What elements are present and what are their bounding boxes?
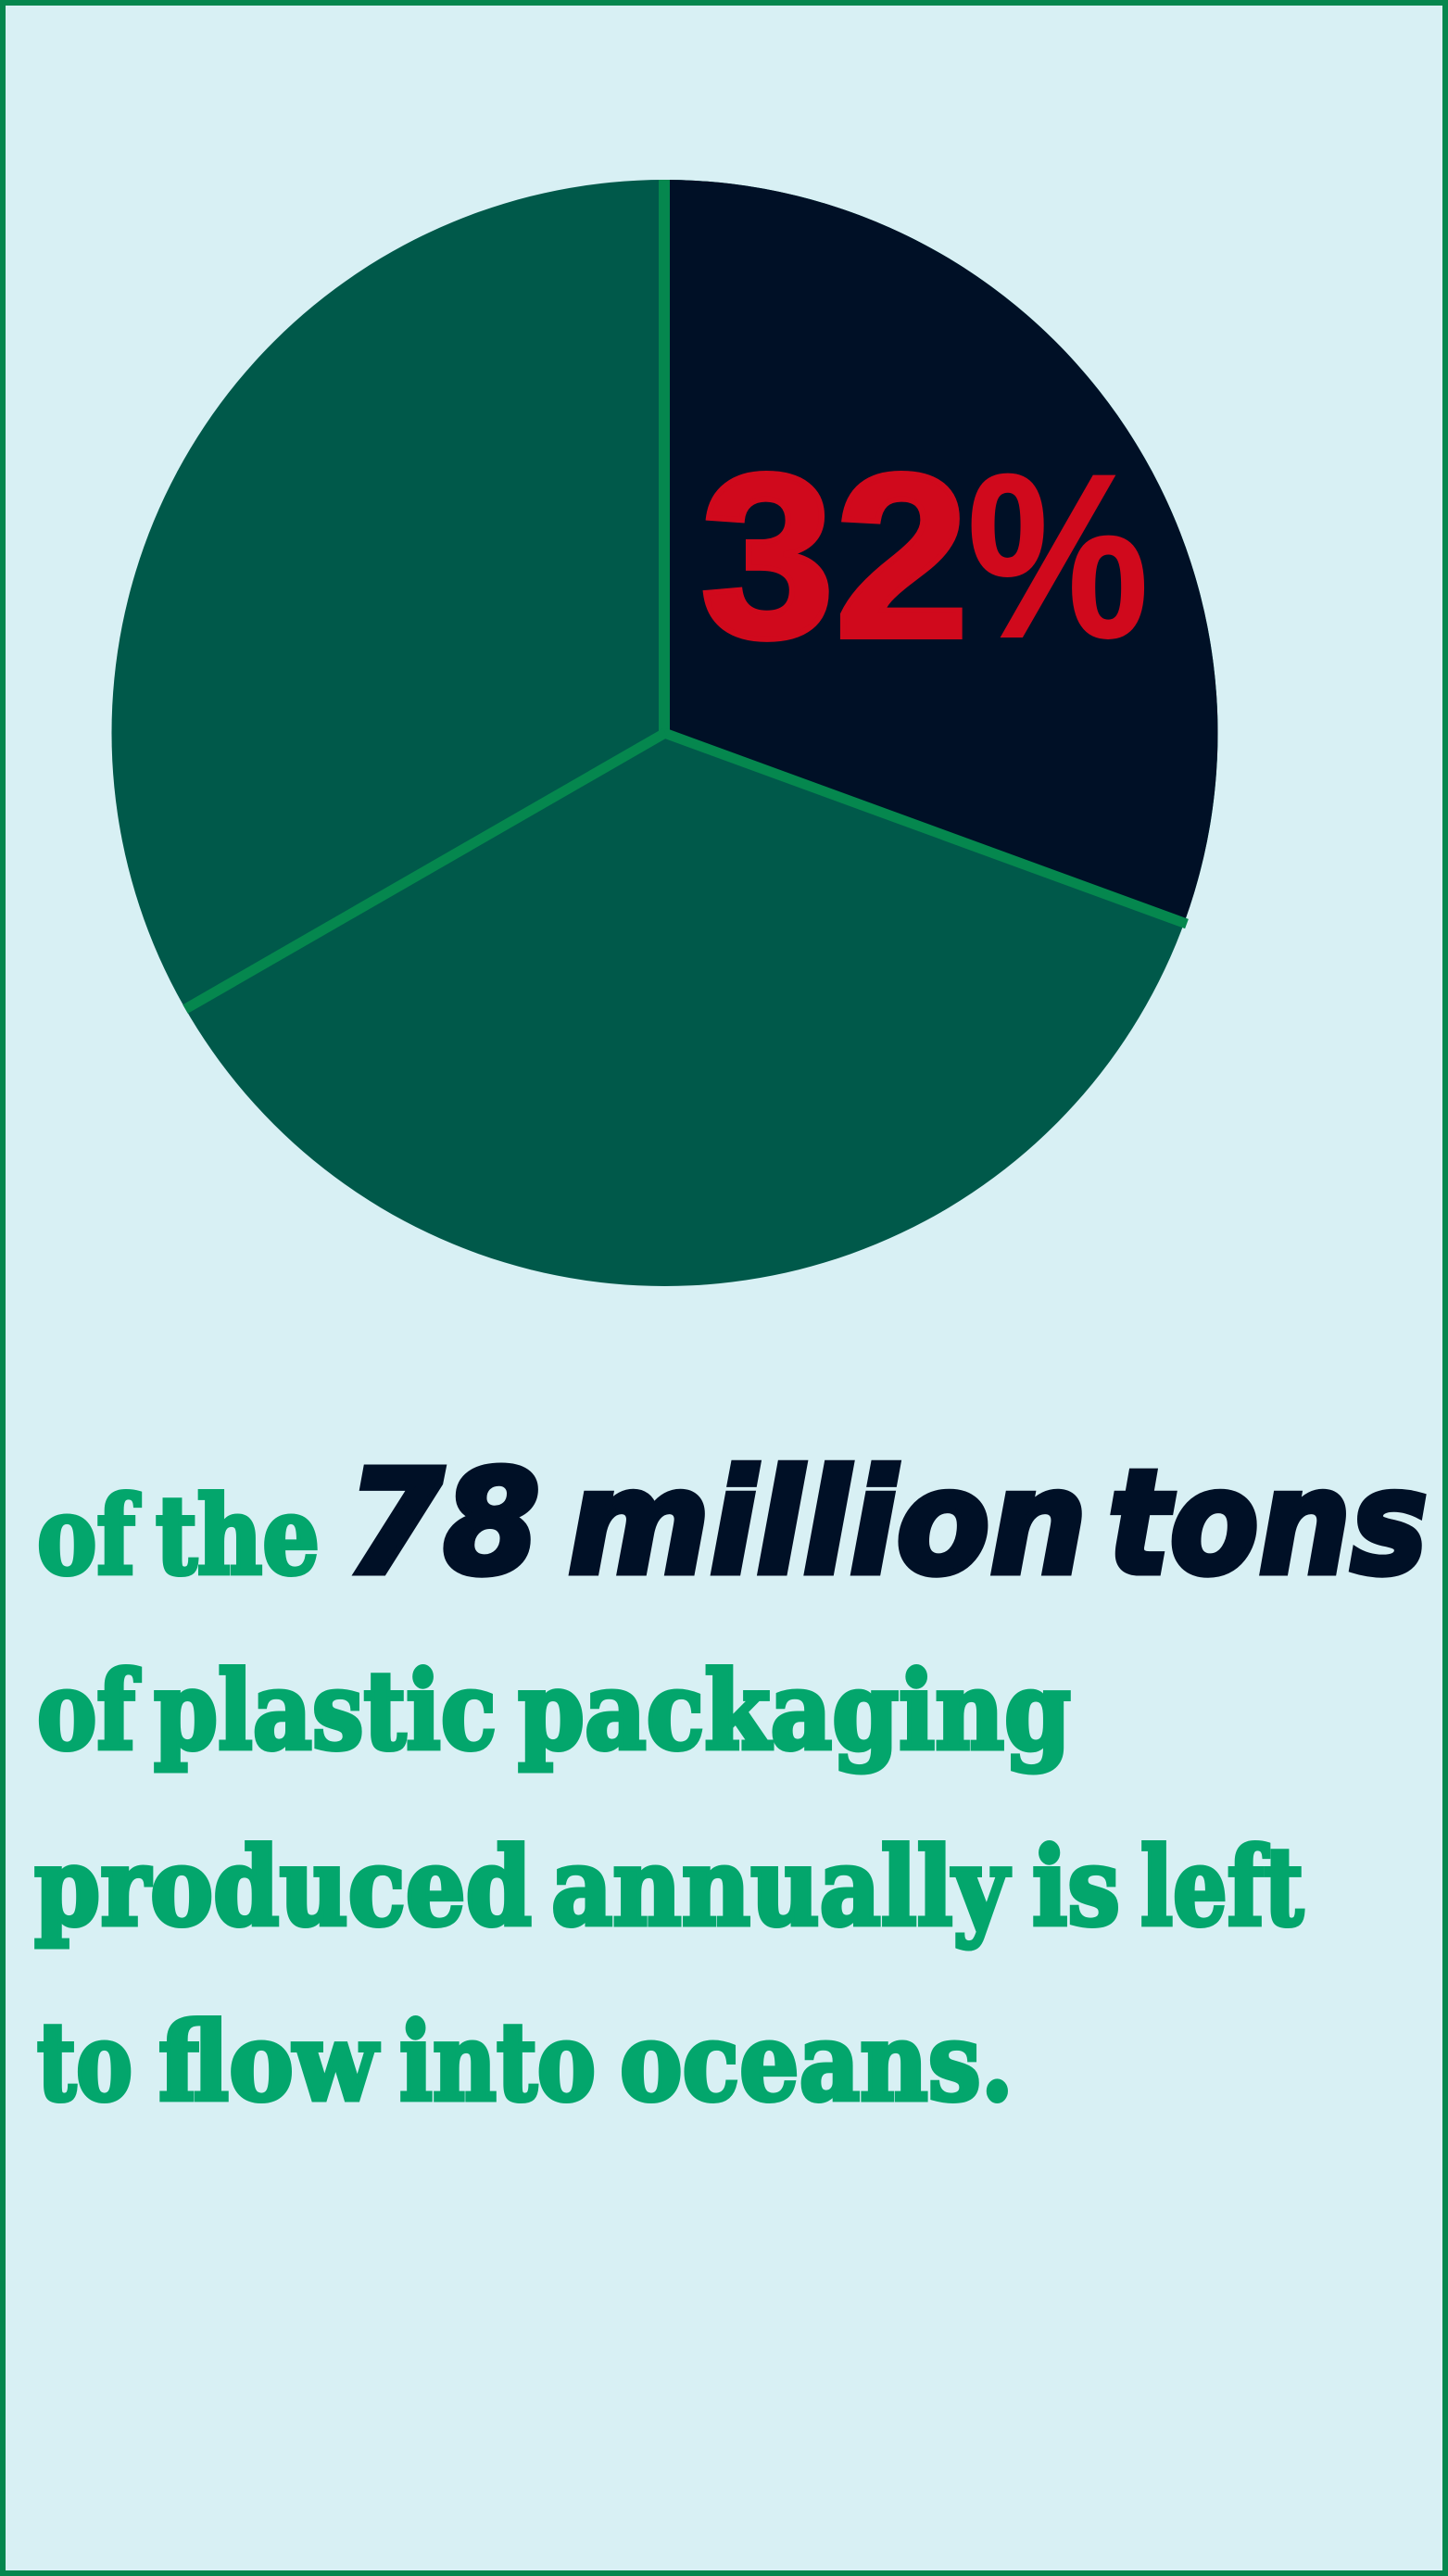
line 4: oceans.	[620, 2000, 1014, 2126]
line 4: into	[399, 2000, 596, 2126]
line 2: packaging	[518, 1648, 1071, 1774]
value label: 32%: %	[967, 426, 1149, 687]
line 4	[37, 2000, 1014, 2126]
line 3: is	[1032, 1825, 1120, 1951]
line 1: of the: the	[156, 1473, 320, 1599]
line 1: of the	[37, 1473, 320, 1599]
line 4: flow	[158, 2000, 380, 2126]
line 4: to	[37, 2000, 132, 2126]
pie spokes	[185, 180, 1187, 1009]
line 1 emphasis: 78 million tons: million	[568, 1439, 1087, 1607]
pie slice: 32 percent navy	[665, 180, 1217, 922]
line 3: produced	[34, 1825, 532, 1951]
line 3: left	[1140, 1825, 1303, 1951]
line 1 emphasis: 78 million tons	[346, 1439, 1428, 1607]
value label: 32%	[700, 426, 1149, 687]
value label: 32%: 32	[700, 426, 969, 687]
pie chart	[111, 180, 1217, 1286]
statement text	[34, 1439, 1428, 2126]
line 2	[37, 1648, 1071, 1774]
line 1: of the: of	[37, 1473, 141, 1599]
line 3	[34, 1825, 1303, 1951]
line 2: of	[37, 1648, 141, 1774]
line 2: plastic	[154, 1648, 497, 1774]
line 3: annually	[551, 1825, 1011, 1951]
line 1 emphasis: 78 million tons: 78	[346, 1439, 540, 1607]
pie slices: green remainder	[111, 180, 1217, 1286]
